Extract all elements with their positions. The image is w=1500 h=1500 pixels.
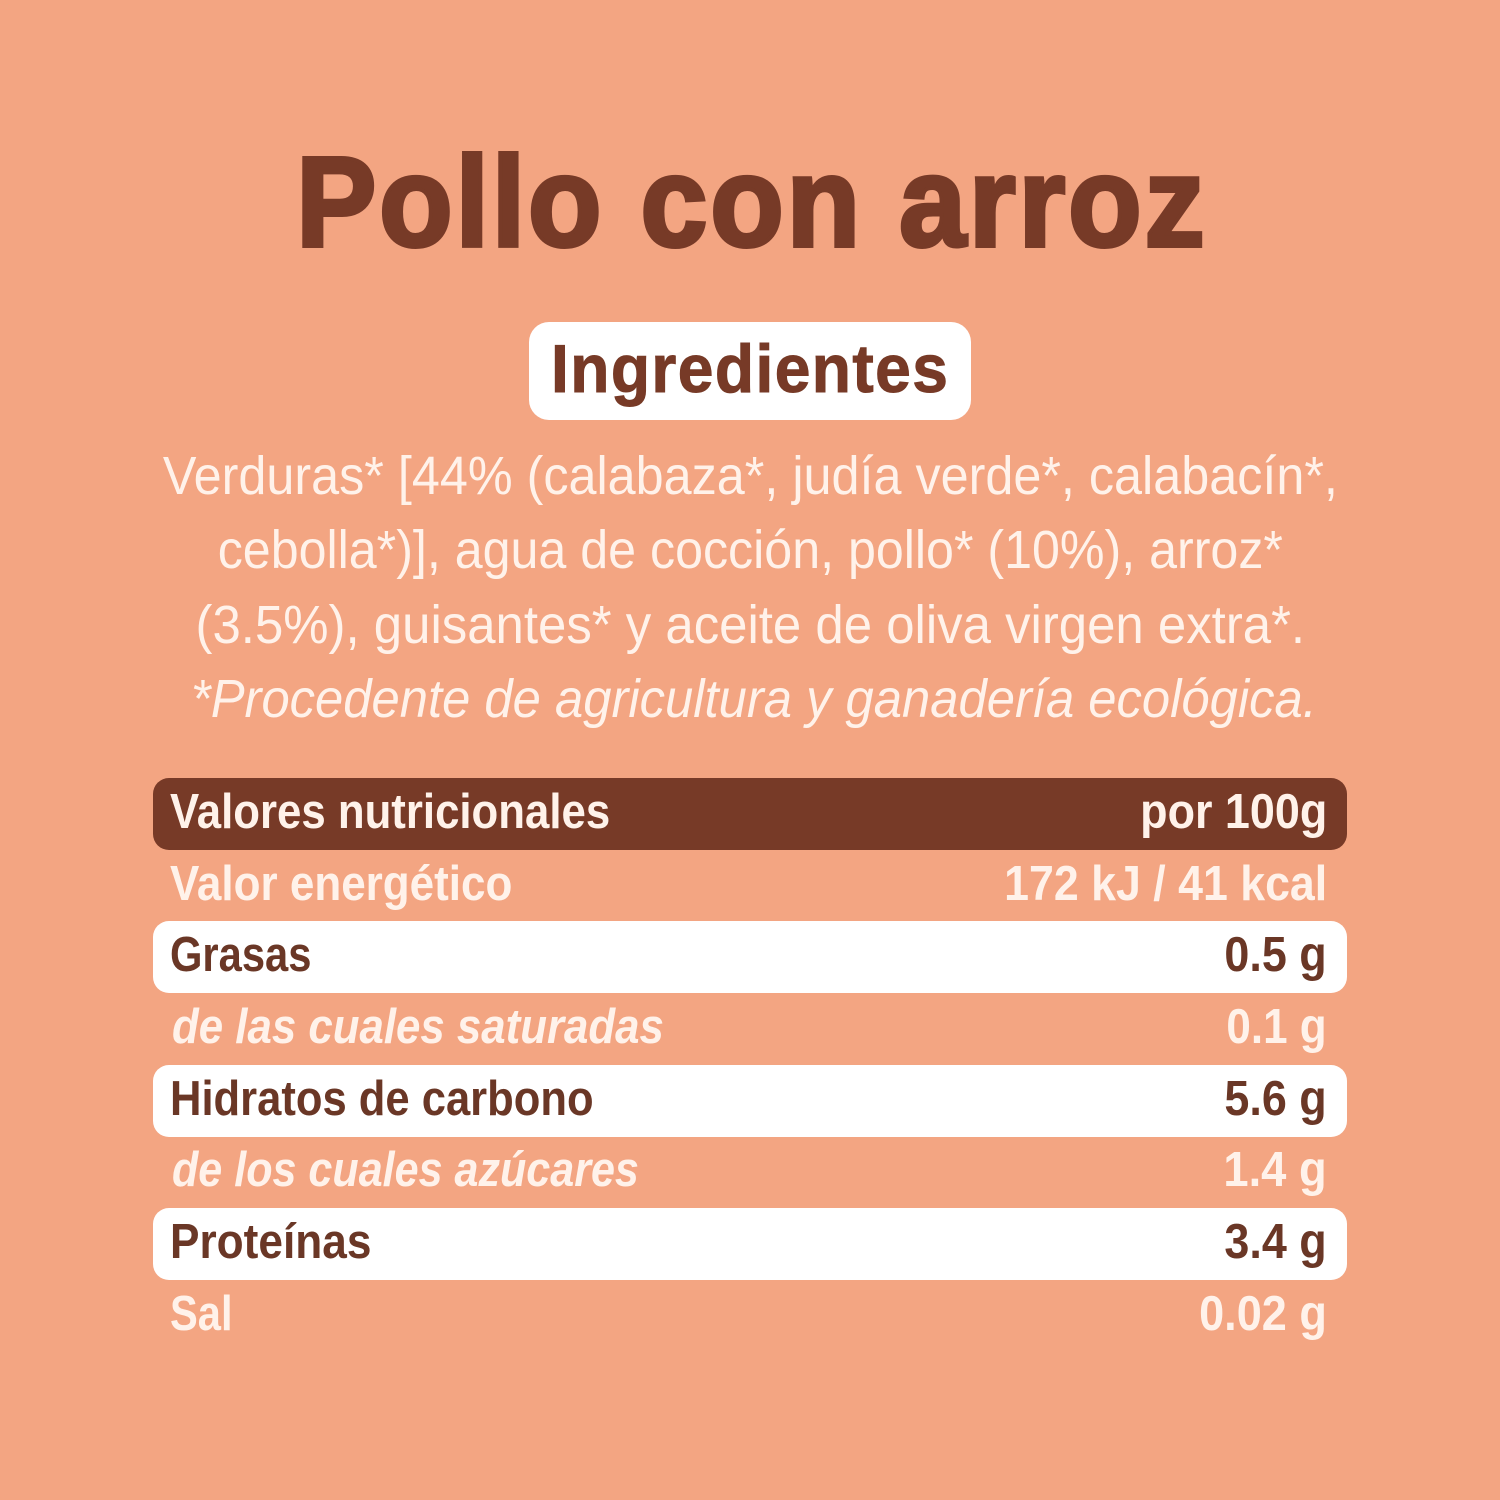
row: proteins: Proteínas: [170, 1215, 371, 1269]
ingredients text: *Procedente de agricultura y ganadería ecológica.: [191, 669, 1317, 729]
nutrition table: [153, 778, 1347, 1341]
title: Pollo con arroz: [296, 131, 1208, 274]
heading: Ingredientes: Ingredientes: [551, 331, 949, 407]
heading: Ingredientes: [529, 322, 971, 420]
row: sugars: [172, 1143, 1327, 1197]
row: saturated: [172, 1000, 1327, 1054]
row: energy: 172 kJ / 41 kcal: [1004, 857, 1327, 911]
row: header: Valores nutricionales: [170, 785, 610, 839]
row: energy: Valor energético: [170, 857, 512, 911]
row: saturated: de las cuales saturadas: [172, 1000, 664, 1054]
row: saturated: 0.1 g: [1227, 1000, 1327, 1054]
ingredients text: (3.5%), guisantes* y aceite de oliva virgen extra*.: [195, 595, 1305, 655]
row: energy: [170, 857, 1327, 911]
row: salt: [170, 1287, 1327, 1341]
row: sugars: 1.4 g: [1224, 1143, 1327, 1197]
row: proteins: [153, 1208, 1347, 1280]
ingredients text: Verduras* [44% (calabaza*, judía verde*, calabacín*,: [162, 446, 1338, 506]
row: carbohydrates: Hidratos de carbono: [170, 1072, 594, 1126]
row: sugars: de los cuales azúcares: [172, 1143, 639, 1197]
row: salt: Sal: [170, 1287, 233, 1341]
ingredients text: cebolla*)], agua de cocción, pollo* (10%), arroz*: [217, 520, 1283, 580]
row: fats: [153, 921, 1347, 993]
row: carbohydrates: [153, 1065, 1347, 1137]
row: header: por 100g: [1140, 785, 1327, 839]
row: proteins: 3.4 g: [1225, 1215, 1327, 1269]
row: fats: 0.5 g: [1225, 928, 1327, 982]
row: header: [153, 778, 1347, 850]
row: salt: 0.02 g: [1199, 1287, 1327, 1341]
row: fats: Grasas: [170, 928, 311, 982]
ingredients text: [162, 446, 1338, 729]
row: carbohydrates: 5.6 g: [1225, 1072, 1327, 1126]
